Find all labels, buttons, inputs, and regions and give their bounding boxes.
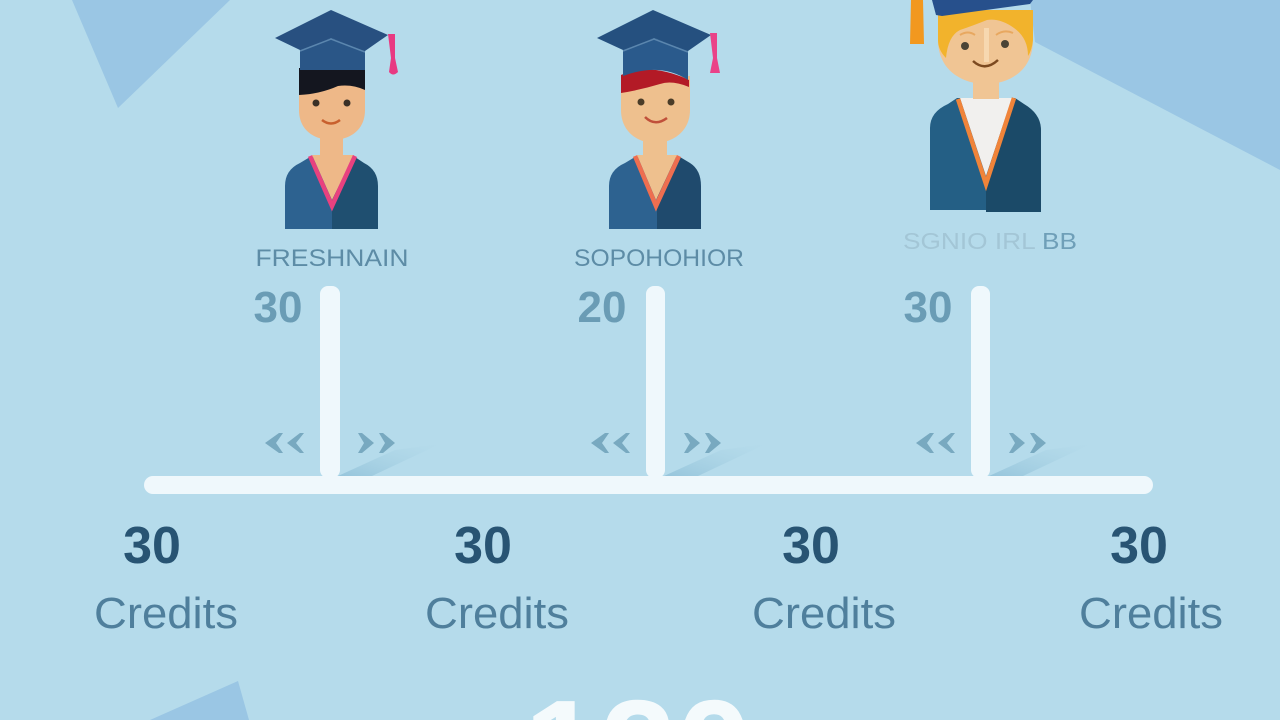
freshman cap — [275, 10, 398, 74]
chevrons 2 — [591, 433, 630, 453]
value 30: 30 — [254, 283, 302, 332]
sophomore cap — [597, 10, 720, 80]
credits 3: Credits — [752, 589, 896, 638]
upper values — [254, 283, 952, 332]
credits 2: 30 — [454, 517, 512, 575]
credits 1 — [94, 517, 238, 638]
senior label: SGNIO IRL BB — [903, 228, 1077, 254]
vertical bar 2 — [646, 286, 665, 478]
credits 1: 30 — [123, 517, 181, 575]
credits 2 — [425, 517, 569, 638]
senior cap — [910, 0, 1033, 44]
freshman gown — [285, 155, 378, 229]
chevrons 1 — [265, 433, 304, 453]
credits 4 — [1079, 517, 1223, 638]
value 30 right: 30 — [904, 283, 952, 332]
freshman label: FRESHNAIN — [256, 245, 408, 272]
senior head — [938, 10, 1033, 99]
senior gown — [930, 98, 1041, 212]
sophomore head — [621, 70, 690, 158]
horizontal axis — [144, 476, 1153, 494]
credits 3: 30 — [782, 517, 840, 575]
credits 3 — [752, 517, 896, 638]
credits 4: 30 — [1110, 517, 1168, 575]
freshman figure — [275, 10, 398, 229]
chevrons — [265, 433, 1046, 453]
sophomore figure — [597, 10, 720, 229]
sophomore label: SOPOHOHIOR — [574, 245, 744, 272]
credits 4: Credits — [1079, 589, 1223, 638]
vertical bar 3 — [971, 286, 990, 478]
chevrons 3 — [916, 433, 955, 453]
vertical bar 1 — [320, 286, 340, 478]
shadows — [338, 444, 440, 476]
freshman head — [299, 68, 365, 158]
credits 2: Credits — [425, 589, 569, 638]
senior figure — [910, 0, 1041, 212]
credits columns — [94, 517, 1223, 638]
sophomore gown — [609, 155, 701, 229]
timeline — [144, 286, 1153, 494]
credits 1: Credits — [94, 589, 238, 638]
value 20: 20 — [578, 283, 626, 332]
